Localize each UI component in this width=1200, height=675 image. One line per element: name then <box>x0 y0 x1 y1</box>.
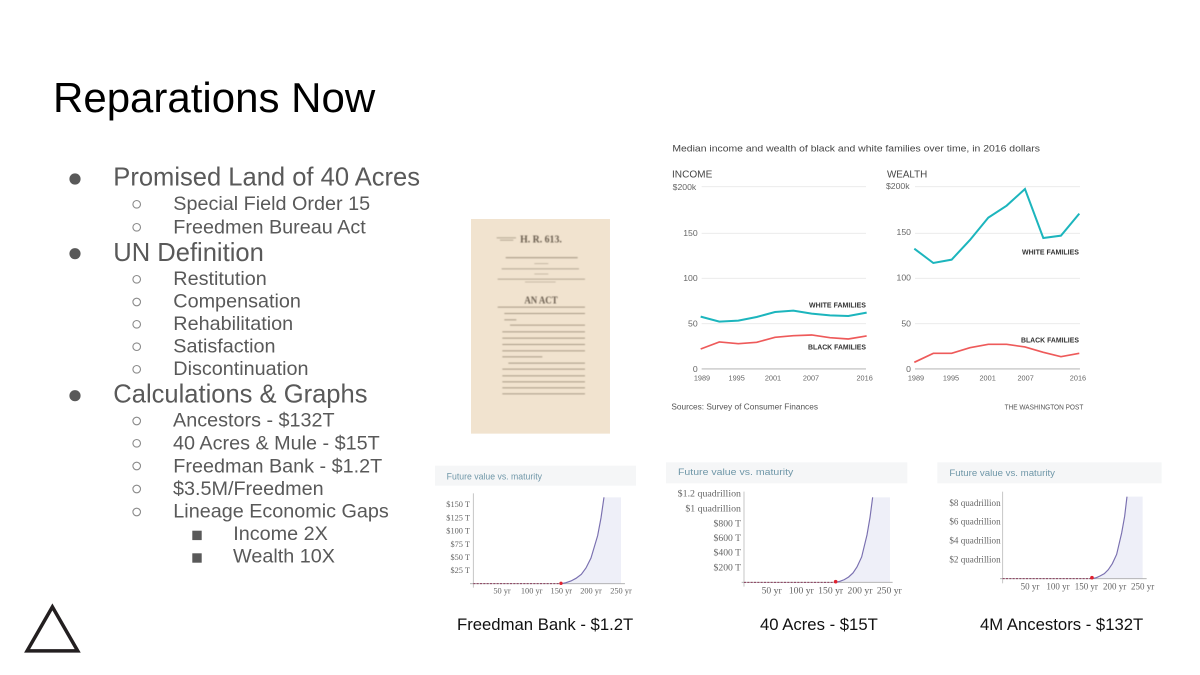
section: Calculations & Graphs: Wealth 10X <box>233 546 335 568</box>
chart: 4M Ancestors future value <box>937 462 1162 591</box>
chart: Freedman Bank future value: 250 yr <box>610 586 632 595</box>
section: UN Definition: Rehabilitation <box>173 313 293 335</box>
section: UN Definition: Restitution <box>173 268 267 290</box>
chart: 40 Acres future value: 100 yr <box>789 586 815 597</box>
panel: wealth: 1989 <box>908 373 924 382</box>
chart: 40 Acres future value: $200 T <box>714 563 741 574</box>
chart: 4M Ancestors future value: $2 quadrillion <box>949 554 1001 564</box>
section: Calculations & Graphs: Income 2X <box>233 523 328 545</box>
chart: 40 Acres future value: 250 yr <box>877 586 903 597</box>
panel: wealth: 2016 <box>1070 373 1086 382</box>
section: Promised Land of 40 Acres: Freedmen Bureau Act <box>173 216 366 238</box>
chart: 40 Acres future value: 50 yr <box>762 586 782 597</box>
section: UN Definition: Discontinuation <box>173 358 309 380</box>
chart: 40 Acres future value <box>666 462 907 597</box>
chart heading: Median income and wealth of black and white families over time, in 2016 dollars <box>672 144 1040 154</box>
panel: income: 2007 <box>803 373 819 382</box>
panel: wealth: $200k <box>886 181 910 191</box>
panel: wealth: WHITE FAMILIES <box>1022 249 1079 256</box>
chart: 4M Ancestors future value: 100 yr <box>1046 581 1070 591</box>
panel: income: $200k <box>673 182 697 192</box>
income and wealth chart <box>671 144 1086 412</box>
bullet list <box>69 164 420 568</box>
section: Calculations & Graphs: Lineage Economic Gaps <box>173 501 389 523</box>
panel: wealth: 0 <box>906 364 911 374</box>
panel: income: 50 <box>688 319 698 329</box>
chart: Freedman Bank future value: $100 T <box>446 527 470 536</box>
icon: triangle logo <box>27 607 78 651</box>
white families income line <box>701 311 867 322</box>
panel: income: WHITE FAMILIES <box>809 302 866 309</box>
panel: wealth <box>886 169 1086 382</box>
panel: wealth: 50 <box>901 319 911 329</box>
panel: income: 0 <box>693 364 698 374</box>
panel: wealth: 2007 <box>1017 373 1034 382</box>
section: Promised Land of 40 Acres <box>69 164 420 238</box>
chart: 40 Acres future value: $1.2 quadrillion <box>678 489 741 500</box>
panel: wealth: 100 <box>897 273 911 283</box>
chart: Freedman Bank future value: $25 T <box>450 566 470 575</box>
credit: THE WASHINGTON POST <box>1005 405 1084 412</box>
panel: wealth: 1995 <box>943 373 959 382</box>
black families wealth line <box>914 344 1079 362</box>
chart: 40 Acres future value: $800 T <box>714 518 741 529</box>
chart: 4M Ancestors future value: 250 yr <box>1131 581 1154 591</box>
chart: 40 Acres future value: $400 T <box>714 548 741 559</box>
panel: wealth: BLACK FAMILIES <box>1021 337 1079 344</box>
document image: H.R. 613 act: AN ACT <box>524 296 558 307</box>
panel: wealth: 150 <box>897 227 911 237</box>
chart: Freedman Bank future value: $50 T <box>450 553 470 562</box>
chart: Freedman Bank future value: 100 yr <box>521 586 543 595</box>
chart: 40 Acres future value: Future value vs. maturity <box>678 467 794 477</box>
chart: 4M Ancestors future value: $4 quadrillion <box>949 535 1001 545</box>
chart: 4M Ancestors future value: 50 yr <box>1021 581 1039 591</box>
caption: Freedman Bank: Freedman Bank - $1.2T <box>457 615 633 634</box>
section: Calculations & Graphs <box>69 380 389 568</box>
black families income line <box>701 335 867 349</box>
chart: 4M Ancestors future value: $6 quadrillion <box>949 517 1001 527</box>
chart: Freedman Bank future value: 150 yr <box>551 586 572 595</box>
section: Promised Land of 40 Acres: Special Field Order 15 <box>173 193 370 215</box>
panel: income: 2016 <box>856 373 873 382</box>
chart: Freedman Bank future value: $75 T <box>450 540 470 549</box>
caption: 40 Acres: 40 Acres - $15T <box>760 615 878 634</box>
section: Calculations & Graphs: 40 Acres & Mule - $15T <box>173 432 380 454</box>
section: UN Definition <box>69 239 309 380</box>
section: Calculations & Graphs: Freedman Bank - $1.2T <box>173 455 382 477</box>
caption: 4M Ancestors: 4M Ancestors - $132T <box>980 615 1143 634</box>
source note: Sources: Survey of Consumer Finances <box>671 403 818 412</box>
chart: 4M Ancestors future value: $8 quadrillion <box>949 498 1001 508</box>
panel: income: 1989 <box>694 373 710 382</box>
chart: Freedman Bank future value: Future value vs. maturity <box>447 471 542 481</box>
section: Calculations & Graphs: $3.5M/Freedmen <box>173 478 324 500</box>
chart: 40 Acres future value: 150 yr <box>818 586 844 597</box>
panel: income: 2001 <box>765 373 781 382</box>
section: UN Definition: Satisfaction <box>173 336 276 358</box>
chart: Freedman Bank future value: 50 yr <box>493 586 511 595</box>
chart: Freedman Bank future value: $125 T <box>446 513 470 522</box>
chart: 4M Ancestors future value: 200 yr <box>1103 581 1126 591</box>
section: Calculations & Graphs: Calculations & Graphs <box>113 380 367 408</box>
chart: 40 Acres future value: $600 T <box>714 533 741 544</box>
white families wealth line <box>914 189 1079 263</box>
panel: income: BLACK FAMILIES <box>808 345 866 352</box>
section: Promised Land of 40 Acres: Promised Land of 40 Acres <box>113 164 420 192</box>
chart: 4M Ancestors future value: Future value vs. maturity <box>949 468 1056 478</box>
chart: Freedman Bank future value <box>435 466 636 595</box>
section: Calculations & Graphs: Ancestors - $132T <box>173 410 335 432</box>
panel: income: INCOME <box>672 169 713 180</box>
document image: H.R. 613 act: H. R. 613. <box>520 235 562 246</box>
chart: 40 Acres future value: 200 yr <box>848 586 873 597</box>
chart: 4M Ancestors future value: 150 yr <box>1075 581 1098 591</box>
chart: Freedman Bank future value: $150 T <box>446 500 470 509</box>
section: UN Definition: Compensation <box>173 291 301 313</box>
section: UN Definition: UN Definition <box>113 239 264 267</box>
panel: wealth: WEALTH <box>887 169 927 180</box>
document image: H.R. 613 act <box>471 219 610 434</box>
panel: wealth: 2001 <box>979 373 996 382</box>
chart: Freedman Bank future value: 200 yr <box>580 586 602 595</box>
panel: income: 150 <box>683 228 698 238</box>
panel: income: 1995 <box>729 373 745 382</box>
panel: income <box>672 169 873 382</box>
chart: 40 Acres future value: $1 quadrillion <box>685 504 741 515</box>
title: Reparations Now <box>53 74 376 121</box>
panel: income: 100 <box>683 273 698 283</box>
